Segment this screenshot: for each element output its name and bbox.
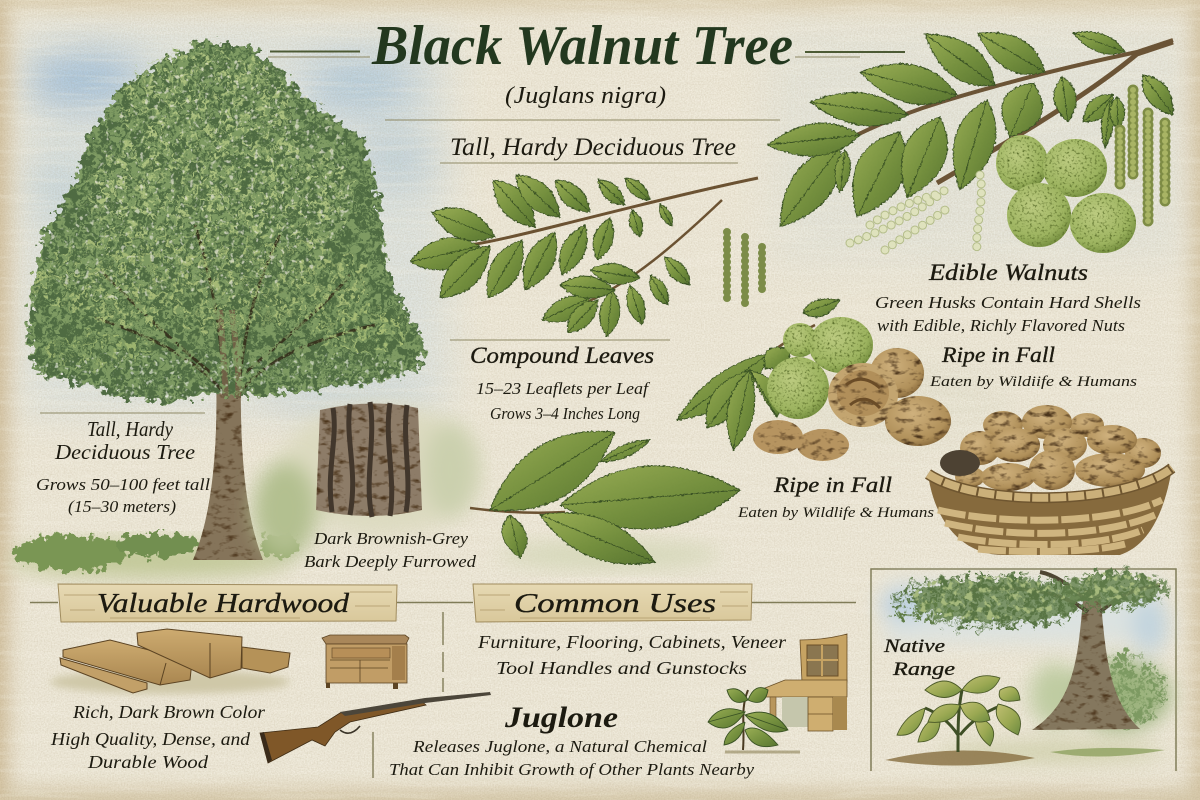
text: compound leaves: Compound Leaves [470, 343, 654, 368]
illustration: compound leaf branch [410, 175, 762, 337]
illustration: rifle [260, 692, 491, 763]
text: ripe in fall, lower [737, 472, 934, 521]
text: compound leaves [450, 340, 670, 423]
text: juglone: Releases Juglone, a Natural Chemical [412, 737, 707, 756]
text: hardwood properties: Rich, Dark Brown Color [72, 702, 266, 722]
trunk [193, 370, 263, 560]
illustration: stacked lumber [50, 629, 290, 694]
subtitle: (Juglans nigra) [505, 83, 666, 109]
text: hardwood properties: High Quality, Dense, and [50, 729, 251, 749]
divider lines [30, 602, 856, 778]
text: bark caption: Dark Brownish-Grey [313, 529, 468, 548]
text: tree description: (15–30 meters) [68, 497, 176, 516]
text: edible walnuts: with Edible, Richly Flavored Nuts [877, 316, 1125, 335]
panel backdrop [880, 582, 1170, 761]
illustration: small plant [708, 688, 800, 752]
panel sapling [897, 676, 1020, 752]
illustration: large tree [10, 40, 425, 578]
text: tree description: Tall, Hardy [87, 417, 174, 441]
text: ripe in fall, upper [929, 342, 1137, 390]
panel label [883, 636, 955, 680]
illustration: single large leaves [470, 431, 740, 569]
text: bark caption [304, 529, 477, 571]
text: compound leaves: Grows 3–4 Inches Long [490, 404, 640, 423]
heading: tall hardy deciduous tree: Tall, Hardy Deciduous Tree [450, 134, 736, 161]
text: hardwood properties: Durable Wood [87, 752, 209, 772]
banner: common uses [473, 584, 752, 622]
panel ground [885, 750, 1035, 766]
title: Black Walnut Tree [371, 15, 793, 77]
banner: valuable hardwood [58, 584, 397, 622]
text: tree description [36, 413, 210, 516]
illustration: basket of walnuts [928, 405, 1172, 555]
panel bushes [1072, 652, 1168, 728]
heading: tall hardy deciduous tree [385, 120, 780, 163]
text: ripe in fall, lower: Eaten by Wildlife & Humans [737, 505, 934, 521]
illustration: wooden desk [765, 634, 847, 731]
text: edible walnuts [875, 260, 1141, 335]
text: common uses list [477, 632, 787, 678]
text: juglone [389, 701, 754, 779]
panel tree trunk [1032, 590, 1140, 730]
text: ripe in fall, lower: Ripe in Fall [773, 472, 892, 497]
text: hardwood properties [50, 702, 266, 772]
banner: common uses: Common Uses [514, 588, 716, 618]
text: edible walnuts: Edible Walnuts [928, 260, 1088, 285]
panel label: Native [883, 636, 945, 657]
illustration: bark [253, 402, 480, 558]
text: common uses list: Furniture, Flooring, Cabinets, Veneer [477, 632, 787, 652]
illustration: walnut cluster [677, 299, 951, 461]
text: compound leaves: 15–23 Leaflets per Leaf [476, 379, 650, 398]
text: bark caption: Bark Deeply Furrowed [304, 552, 477, 571]
illustration: wooden cabinet [322, 635, 409, 689]
text: juglone: That Can Inhibit Growth of Other Plants Nearby [389, 760, 754, 779]
illustration: top branch with walnuts [767, 32, 1173, 253]
ground shrubs [10, 533, 300, 578]
text: ripe in fall, upper: Ripe in Fall [941, 342, 1055, 367]
canopy [27, 40, 425, 402]
text: tree description: Deciduous Tree [54, 440, 195, 464]
text: common uses list: Tool Handles and Gunstocks [496, 658, 747, 678]
text: ripe in fall, upper: Eaten by Wildiife & Humans [929, 374, 1137, 390]
panel: native range [871, 569, 1176, 771]
text: tree description: Grows 50–100 feet tall [36, 475, 210, 494]
panel tree foliage [915, 574, 1165, 622]
text: edible walnuts: Green Husks Contain Hard Shells [875, 293, 1141, 312]
panel label: Range [892, 659, 955, 680]
text: juglone: Juglone [504, 701, 618, 734]
banner: valuable hardwood: Valuable Hardwood [97, 588, 350, 618]
